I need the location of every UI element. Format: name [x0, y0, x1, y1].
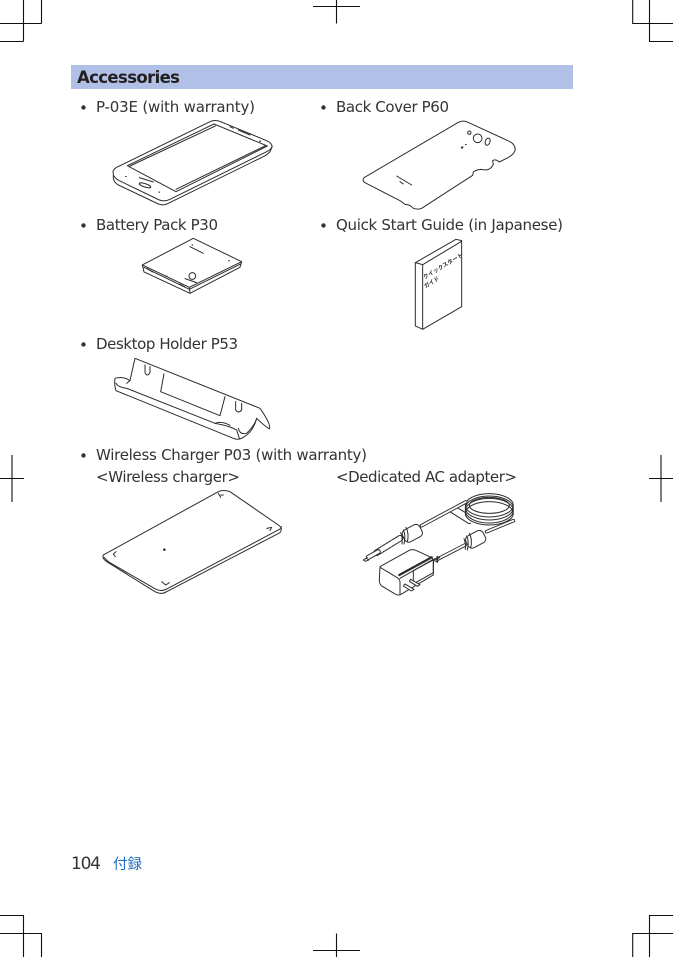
heading band: Accessories — [71, 65, 573, 89]
item: P-03E label: P-03E (with warranty) — [96, 98, 255, 116]
icon: wireless charger pad — [103, 490, 281, 593]
cables drawn as double lines — [422, 502, 466, 526]
heading band: Accessories: Accessories — [77, 68, 180, 87]
icon: desktop holder — [115, 358, 270, 439]
page number and section: 付録 — [113, 853, 142, 874]
page number and section — [71, 853, 142, 874]
page number and section: 104 — [71, 854, 101, 874]
item: Back Cover label: Back Cover P60 — [336, 98, 449, 116]
icon: AC adapter with coiled cable — [363, 494, 513, 595]
label: wireless charger: <Wireless charger> — [96, 468, 240, 486]
label: dedicated AC adapter: <Dedicated AC adapter> — [336, 468, 517, 486]
icon: quick start guide booklet: ガイド — [422, 273, 441, 290]
item: Battery Pack label: Battery Pack P30 — [96, 216, 218, 234]
item: Quick Start Guide label: Quick Start Guide (in Japanese) — [336, 216, 563, 234]
icon: quick start guide booklet — [415, 239, 464, 329]
item: Desktop Holder label: Desktop Holder P53 — [96, 335, 238, 353]
item: Wireless Charger label: Wireless Charger P03 (with warranty) — [96, 446, 367, 464]
icon: battery — [142, 238, 242, 293]
icon: back cover — [363, 121, 515, 209]
icon: smartphone — [113, 120, 272, 205]
icon: quick start guide booklet: クイックスタート — [421, 250, 464, 281]
